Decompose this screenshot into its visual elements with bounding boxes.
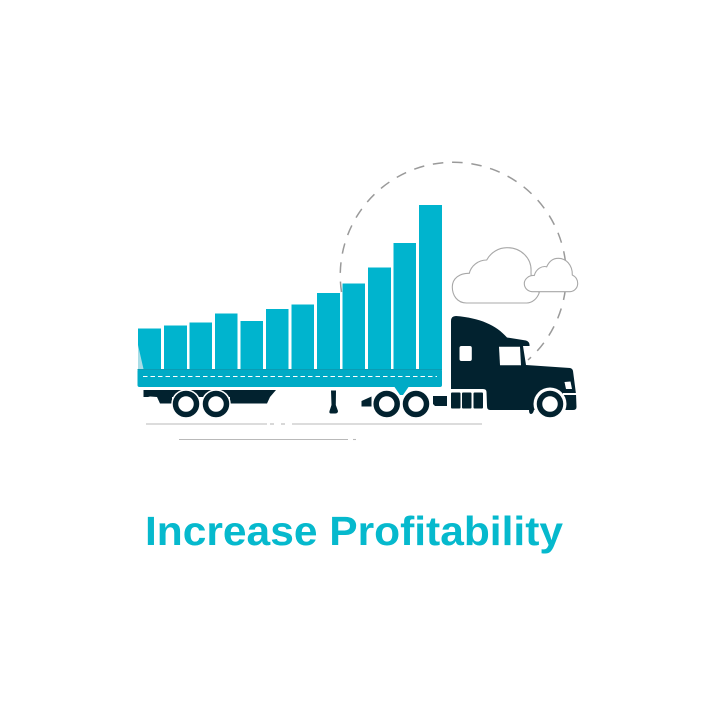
bumper gap [563,393,577,395]
trailer wheels [176,394,426,414]
sleeper window [460,346,472,361]
small cloud [524,258,578,292]
clouds [452,248,578,303]
headlight [564,382,572,389]
road lines [146,424,482,440]
bar chart trailer load [138,205,442,370]
trailer platform [138,369,442,395]
trailer skirt [144,390,276,404]
landing gear [329,390,338,414]
side step [433,396,447,406]
large cloud [452,248,539,303]
cab wheel [540,394,560,414]
truck cab [451,316,577,420]
rear axle fender [362,396,372,406]
windshield [499,347,521,365]
bar highlight [138,345,144,369]
fuel tank [451,392,483,408]
dashed circle [340,162,566,360]
wheel halos [171,389,231,419]
wheel arch [534,388,566,420]
title: Increase Profitability [145,508,563,554]
